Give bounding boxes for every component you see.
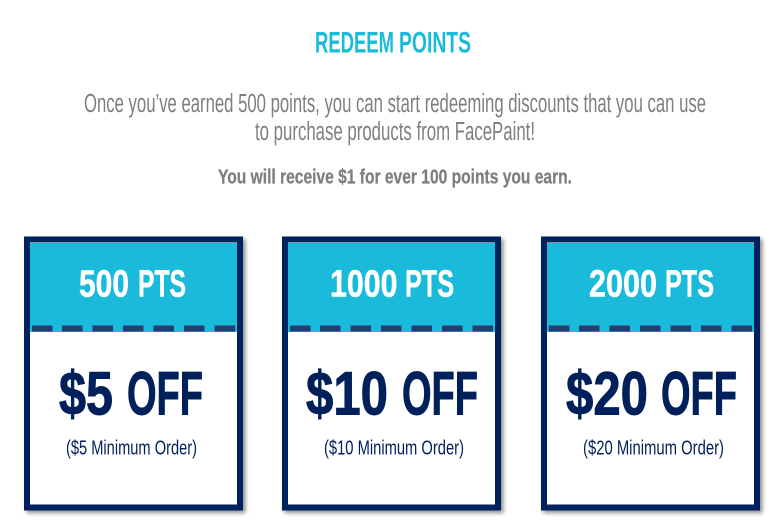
coupon: 1000 pts: [285, 240, 498, 508]
points label: 2000: [589, 264, 657, 306]
coupon header: [547, 243, 754, 332]
discount: $10: [306, 360, 388, 428]
minimum order: ($10 Minimum Order): [324, 438, 464, 460]
intro text: to purchase products from FacePaint!: [255, 118, 535, 146]
discount: OFF: [127, 360, 203, 428]
discount: $5: [59, 360, 113, 428]
title: REDEEM: [315, 26, 394, 60]
points label: PTS: [138, 264, 186, 306]
coupon: 2000 pts: [544, 240, 757, 508]
discount: $20: [566, 360, 648, 428]
dashed tear line: [32, 326, 235, 332]
points label: [79, 264, 186, 306]
dashed tear line: [290, 326, 493, 332]
discount: [59, 360, 203, 428]
discount: OFF: [402, 360, 478, 428]
points label: 1000: [330, 264, 398, 306]
minimum order: ($20 Minimum Order): [583, 438, 724, 460]
coupon header: [30, 243, 237, 332]
dashed tear line: [549, 326, 752, 332]
points label: [589, 264, 714, 306]
points label: PTS: [665, 264, 714, 306]
minimum order: ($5 Minimum Order): [66, 438, 197, 460]
points label: PTS: [405, 264, 454, 306]
title: POINTS: [399, 26, 471, 60]
points label: [330, 264, 454, 306]
coupon: 500 pts: [27, 240, 240, 508]
points rule: You will receive $1 for ever 100 points you earn.: [218, 166, 572, 188]
intro text: [84, 90, 706, 146]
discount: [306, 360, 478, 428]
points label: 500: [79, 264, 129, 306]
discount: OFF: [661, 360, 737, 428]
discount: [566, 360, 737, 428]
coupon header: [288, 243, 495, 332]
